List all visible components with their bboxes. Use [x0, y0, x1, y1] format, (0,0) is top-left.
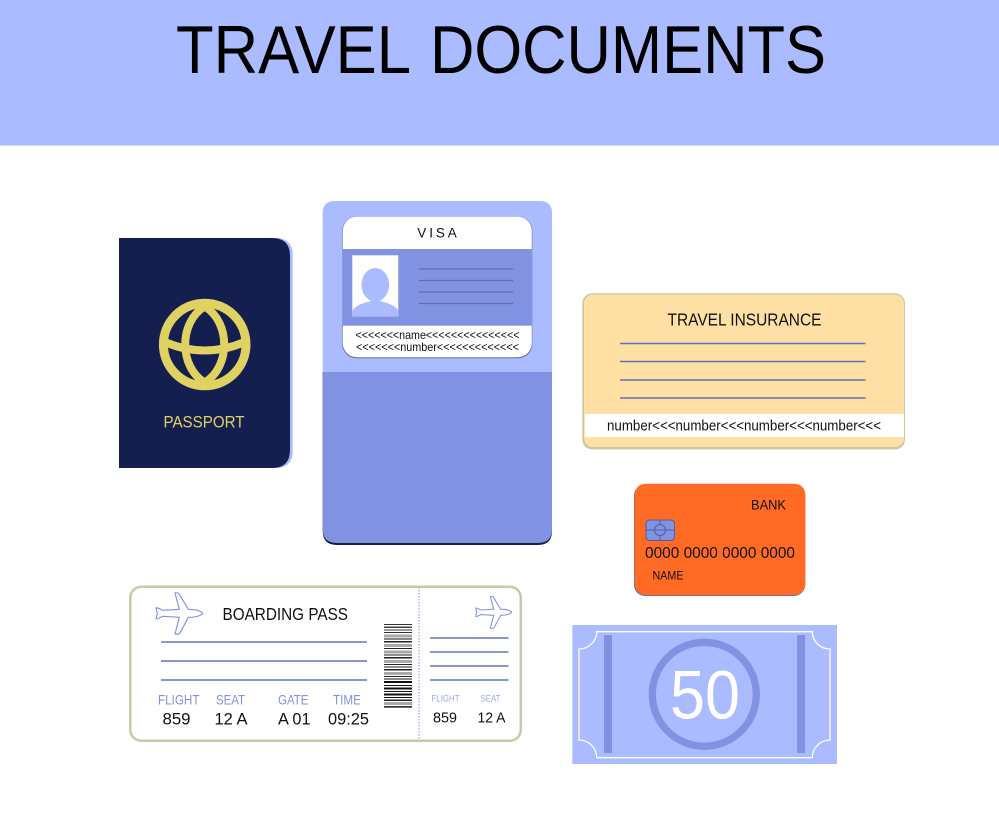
- machine readable text: <<<<<<<number<<<<<<<<<<<<<: [356, 340, 519, 354]
- travel insurance card: [582, 293, 905, 450]
- icon: plane small: [476, 596, 512, 628]
- title: [176, 12, 826, 88]
- stub values: 12 A: [478, 710, 506, 726]
- field labels: FLIGHT: [158, 692, 200, 707]
- note value: 50: [670, 656, 740, 733]
- visa heading: VISA: [417, 225, 457, 240]
- photo: [352, 255, 398, 316]
- card number: 0000 0000 0000 0000: [645, 545, 795, 562]
- barcode: [384, 624, 412, 708]
- passport label: PASSPORT: [164, 413, 244, 432]
- insurance lines: [620, 344, 866, 398]
- card name: NAME: [652, 571, 684, 583]
- perforation: [418, 587, 420, 740]
- title: DOCUMENTS: [430, 12, 826, 88]
- icon: globe: [163, 303, 246, 386]
- note border: [579, 632, 830, 758]
- field labels: GATE: [278, 692, 308, 707]
- visa card: [342, 217, 532, 358]
- bank label: BANK: [751, 498, 786, 512]
- insurance number: number<<<number<<<number<<<number<<<: [607, 417, 881, 434]
- field values: A 01: [278, 709, 310, 728]
- passport: [119, 238, 293, 468]
- field values: 12 A: [214, 709, 248, 728]
- stub values: 859: [433, 710, 457, 726]
- stub labels: FLIGHT: [432, 694, 460, 704]
- field labels: SEAT: [216, 692, 245, 707]
- boarding heading: BOARDING PASS: [222, 604, 348, 624]
- stub lines: [430, 638, 508, 680]
- visa lines: [419, 269, 513, 304]
- boarding pass: [130, 587, 521, 741]
- main lines: [161, 642, 367, 680]
- visa folder: [323, 201, 552, 545]
- bank card: [634, 484, 805, 596]
- header band: [0, 0, 999, 146]
- note circle: [652, 642, 756, 746]
- field values: 09:25: [328, 709, 369, 728]
- note bars: [604, 635, 612, 753]
- field labels: TIME: [333, 692, 361, 707]
- stub labels: [432, 694, 501, 704]
- icon: chip: [646, 520, 674, 540]
- stub labels: SEAT: [480, 694, 501, 704]
- stub values: [433, 710, 506, 726]
- machine readable text: [356, 328, 520, 354]
- field values: [162, 709, 369, 728]
- field labels: [158, 692, 361, 707]
- title: TRAVEL: [176, 12, 411, 88]
- insurance heading: TRAVEL INSURANCE: [668, 310, 822, 330]
- field values: 859: [162, 709, 190, 728]
- banknote: [572, 625, 837, 764]
- icon: plane large: [156, 593, 203, 634]
- machine readable text: <<<<<<<name<<<<<<<<<<<<<<<: [356, 328, 520, 342]
